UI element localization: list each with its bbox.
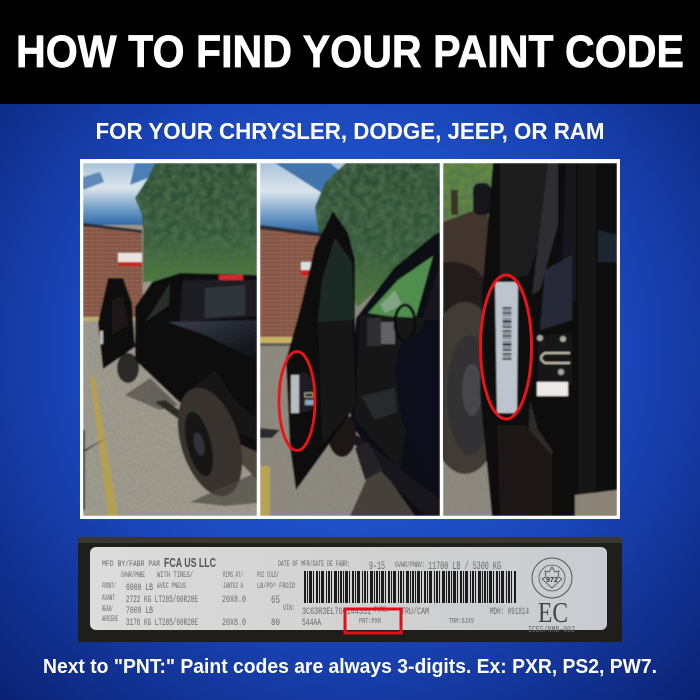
sticker text: TRM:GJX9 bbox=[449, 618, 474, 626]
sticker text: 3C63R3EL7G0144331 bbox=[302, 607, 371, 618]
ICES label: ICES/NMB-002 bbox=[528, 625, 575, 635]
title banner bbox=[0, 0, 700, 104]
sticker text: GVWR/PNBV: bbox=[395, 561, 425, 570]
sticker text: AVEC PNEUS bbox=[157, 582, 186, 591]
red circle on door bbox=[279, 352, 315, 450]
sticker text: 20X8.0 bbox=[222, 595, 246, 606]
panel: door jamb close-up bbox=[424, 163, 617, 516]
sticker text: ARRIERE bbox=[102, 615, 118, 624]
barcode bbox=[304, 571, 516, 603]
sticker text: TRU/CAM bbox=[401, 606, 429, 618]
subtitle: FOR YOUR CHRYSLER, DODGE, JEEP, OR RAM bbox=[96, 118, 604, 144]
transport canada seal bbox=[532, 558, 572, 598]
sticker text: REAR/ bbox=[102, 605, 113, 614]
sticker text: MFD BY/FABR PAR bbox=[102, 560, 160, 569]
EC mark: EC bbox=[538, 598, 568, 629]
sticker text: WITH TIRES/ bbox=[157, 571, 193, 580]
sticker text: DATE OF MFR/DATE DE FABR: bbox=[278, 560, 350, 569]
sticker text: 544AA bbox=[302, 618, 321, 629]
sticker text: 3176 KG LT285/60R20E bbox=[126, 617, 198, 629]
sticker text: 65 bbox=[271, 595, 280, 607]
panel: open door with sticker circled bbox=[260, 163, 440, 516]
sticker text: 80 bbox=[271, 618, 280, 629]
sticker text: 9-15 bbox=[369, 561, 385, 573]
sticker text: 2722 KG LT285/60R20E bbox=[126, 594, 198, 606]
sticker text: GVWR/PNBE bbox=[121, 571, 145, 580]
sticker text: FCA US LLC bbox=[164, 556, 216, 570]
red circle on sticker bbox=[480, 275, 532, 419]
sticker text: VIN: bbox=[283, 604, 295, 613]
transport canada seal: 972 bbox=[546, 577, 558, 584]
sticker text: 7000 LB bbox=[126, 606, 153, 617]
sticker text: PSI COLD/ bbox=[257, 571, 279, 580]
photo frame bbox=[80, 159, 620, 519]
red box around paint code bbox=[345, 609, 401, 633]
door sticker close-up bbox=[78, 537, 622, 642]
panel: truck with open door bbox=[83, 163, 257, 516]
footer note: Next to "PNT:" Paint codes are always 3-digits. Ex: PXR, PS2, PW7. bbox=[43, 655, 657, 678]
sticker text: MDH: 091814 bbox=[490, 607, 529, 618]
sticker text: 6000 LB bbox=[126, 583, 153, 594]
sticker text: RIMS AT/ bbox=[223, 571, 243, 580]
sticker text: AVANT bbox=[102, 594, 115, 603]
sticker text: 11700 LB / 5300 KG bbox=[428, 561, 501, 573]
sticker text: 20X8.0 bbox=[222, 618, 246, 629]
sticker text: PNT:PXR bbox=[359, 618, 382, 626]
sticker text: LB/PO² FROID bbox=[257, 582, 295, 591]
sticker text: FRONT/ bbox=[102, 582, 116, 591]
sticker text bbox=[102, 556, 529, 629]
sticker text: JANTES A bbox=[223, 582, 243, 591]
sticker text: TYPE: bbox=[374, 606, 389, 615]
